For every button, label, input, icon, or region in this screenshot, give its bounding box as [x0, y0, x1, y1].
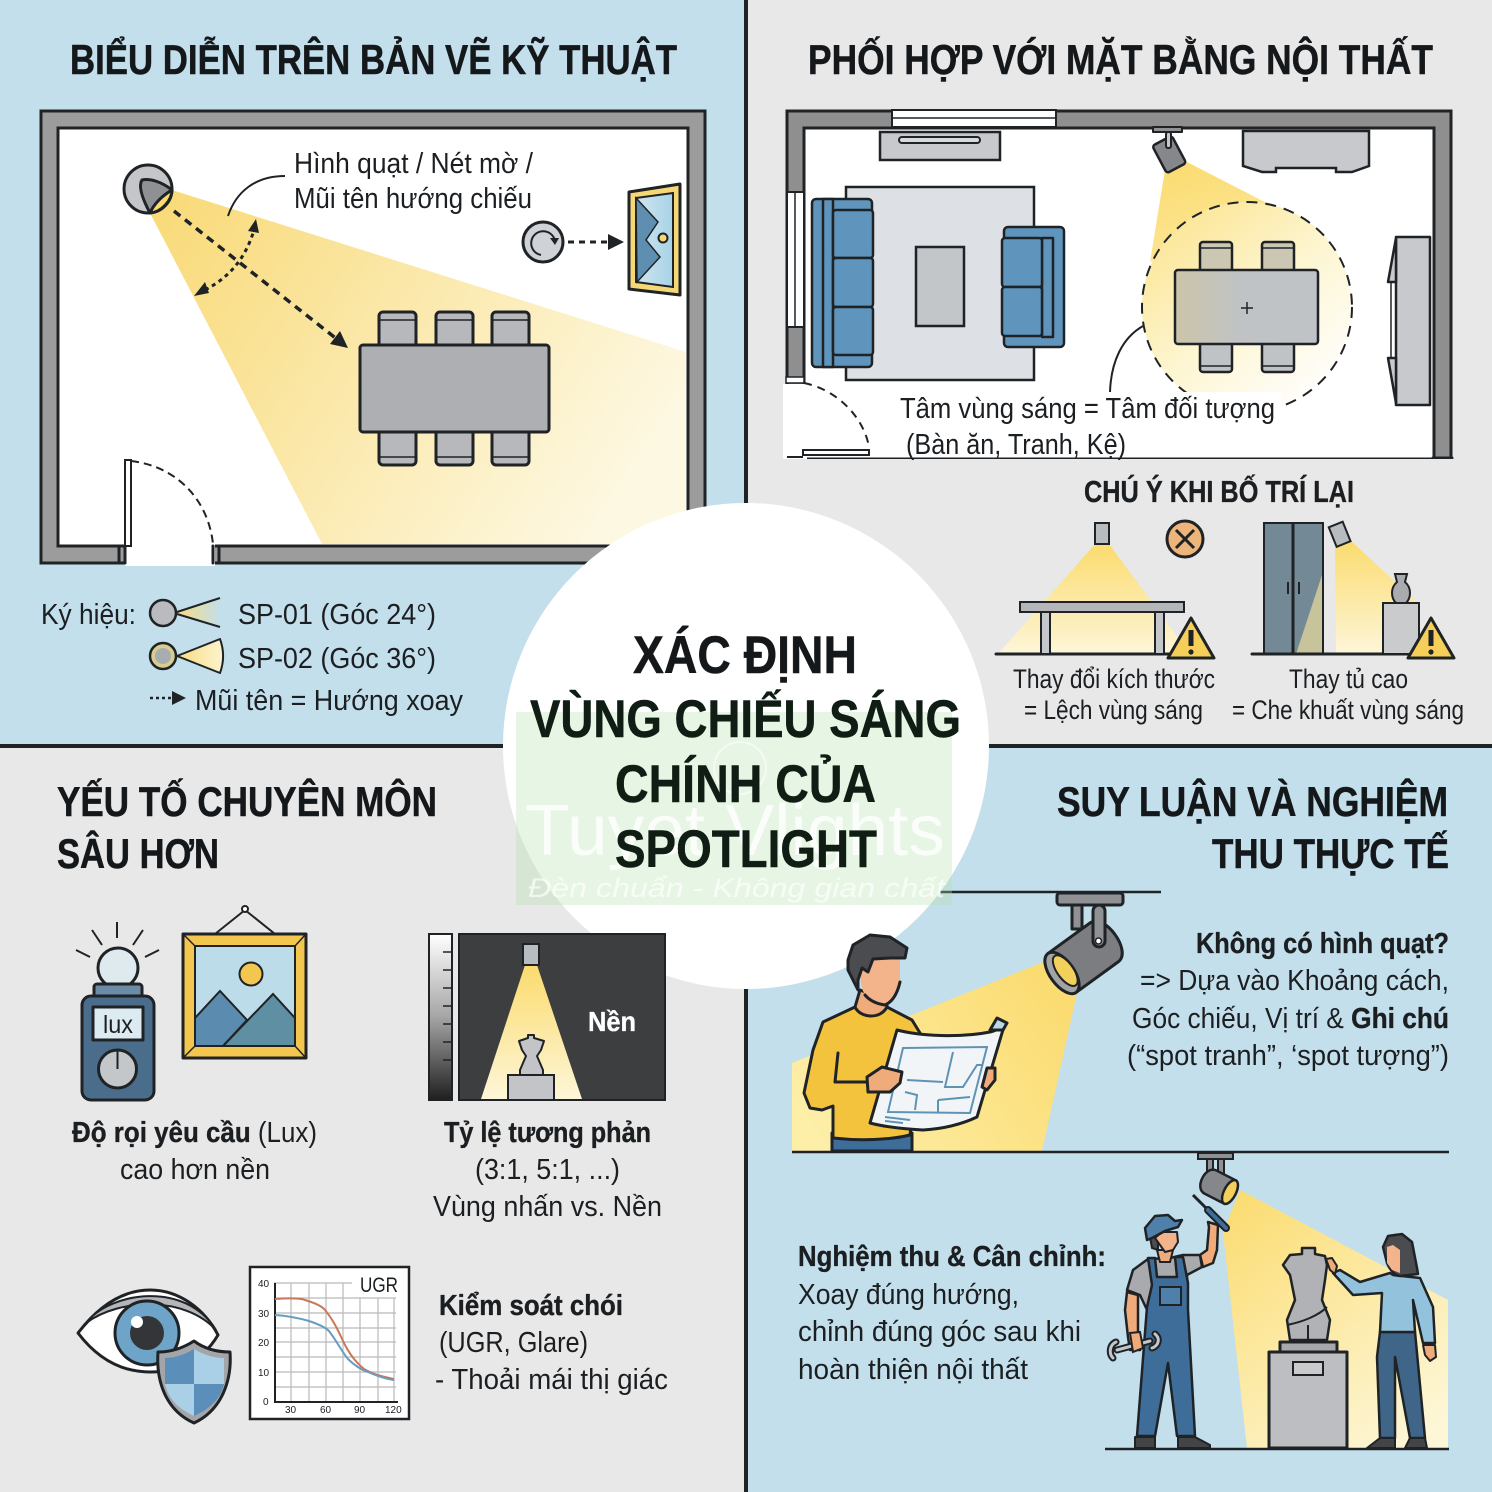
central white circle — [503, 503, 989, 989]
symbol legend: SP-01 (Góc 24°) — [238, 599, 436, 631]
second track spotlight — [1196, 1153, 1241, 1206]
caption: contrast ratio: (3:1, 5:1, ...) — [475, 1154, 620, 1186]
legend icon SP-01 — [150, 598, 220, 627]
caption: acceptance and adjustment: chỉnh đúng góc sau khi — [798, 1316, 1081, 1348]
axis labels: 60 — [320, 1405, 332, 1416]
axis labels: 10 — [258, 1368, 270, 1379]
wall spotlight symbol with arrow — [523, 222, 624, 262]
heading: expertise: YẾU TỐ CHUYÊN MÔN — [57, 777, 437, 825]
caption: glare control: (UGR, Glare) — [439, 1327, 588, 1359]
warning caption: size change: = Lệch vùng sáng — [1024, 695, 1203, 725]
axis labels: 40 — [258, 1279, 270, 1290]
symbol legend: Mũi tên = Hướng xoay — [195, 685, 463, 717]
legend icon SP-02 — [150, 639, 223, 673]
main title — [530, 625, 961, 879]
axis labels: 90 — [354, 1405, 366, 1416]
rug — [846, 187, 1034, 380]
symbol legend — [41, 598, 463, 717]
spotlight symbol — [124, 165, 172, 213]
dining table with chairs — [1175, 242, 1318, 372]
caption: illuminance: cao hơn nền — [120, 1154, 270, 1186]
ceiling spotlight — [1152, 127, 1186, 173]
caption: contrast ratio: Tỷ lệ tương phản — [444, 1117, 651, 1149]
symbol legend: SP-02 (Góc 36°) — [238, 643, 436, 675]
caption: illuminance — [72, 1117, 317, 1186]
warning caption: size change — [1013, 664, 1215, 725]
warning caption: size change: Thay đổi kích thước — [1013, 664, 1215, 694]
caption: acceptance and adjustment: hoàn thiện nội thất — [798, 1354, 1028, 1386]
callout text: Hình quạt / Nét mờ / — [294, 148, 534, 180]
curve: upper — [275, 1298, 394, 1379]
icon: warning triangle — [1408, 618, 1454, 658]
right-hand shelf — [1388, 237, 1430, 405]
callout text: Mũi tên hướng chiếu — [294, 183, 532, 215]
woman pointing at statue — [1326, 1234, 1436, 1448]
chart: UGR glare curve — [250, 1267, 409, 1419]
light beam on statue — [1223, 1190, 1448, 1448]
door swing — [804, 383, 869, 447]
caption: glare control: - Thoải mái thị giác — [435, 1364, 668, 1396]
sofa — [812, 199, 873, 367]
statue on pedestal — [1269, 1248, 1347, 1448]
coffee table — [916, 247, 964, 326]
heading: inference: THU THỰC TẾ — [1212, 830, 1449, 877]
icon: error cross — [1167, 521, 1203, 557]
heading: inference — [1057, 777, 1449, 877]
light beam on reader — [792, 961, 1077, 1151]
caption: illuminance: Độ rọi yêu cầu (Lux) — [72, 1117, 317, 1149]
main title: VÙNG CHIẾU SÁNG — [530, 689, 961, 749]
callout text: Tâm vùng sáng = Tâm đối tượng — [900, 393, 1275, 425]
door — [125, 460, 213, 546]
callout leader — [1110, 326, 1143, 392]
screwdriver — [1193, 1195, 1226, 1228]
warning caption: tall cabinet — [1232, 664, 1464, 725]
wrench — [1110, 1334, 1158, 1358]
text: no fan shape: (“spot tranh”, ‘spot tượng”) — [1127, 1040, 1449, 1072]
callout leader — [228, 176, 285, 216]
floor line — [1105, 1448, 1449, 1450]
legend arrow — [150, 691, 186, 705]
caption: contrast ratio — [433, 1117, 662, 1223]
text: no fan shape: Góc chiếu, Vị trí & Ghi chú — [1132, 1003, 1449, 1035]
caption: contrast ratio: Vùng nhấn vs. Nền — [433, 1191, 662, 1223]
panel: technical drawing — [41, 35, 705, 717]
text: no fan shape: => Dựa vào Khoảng cách, — [1140, 965, 1449, 997]
callout text: (Bàn ăn, Tranh, Kệ) — [906, 429, 1126, 461]
callout text — [895, 392, 1281, 461]
callout text — [294, 148, 534, 215]
room plan walls — [780, 110, 1454, 464]
heading: expertise: SÂU HƠN — [57, 829, 219, 877]
panel: interior layout coordination — [780, 35, 1464, 725]
caption: acceptance and adjustment: Nghiệm thu & Cân chỉnh: — [798, 1241, 1106, 1273]
axis labels: 120 — [385, 1405, 402, 1416]
panel: deeper expertise — [57, 777, 668, 1423]
lit dining zone — [1142, 127, 1352, 412]
door threshold — [787, 450, 869, 457]
caption: acceptance and adjustment: Xoay đúng hướng, — [798, 1279, 1019, 1311]
person reading blueprint — [804, 935, 1007, 1151]
worker adjusting spotlight — [1110, 1195, 1226, 1448]
axis labels: 30 — [285, 1405, 297, 1416]
watermark: Đèn chuẩn - Không gian chất — [528, 873, 947, 903]
caption: glare control — [435, 1290, 668, 1396]
direction arrows — [174, 211, 348, 348]
watermark: Tuyet Vlights — [525, 791, 945, 871]
dining table — [360, 312, 549, 465]
axis labels: 30 — [258, 1309, 270, 1320]
watermark — [516, 712, 952, 905]
caption: glare control: Kiểm soát chói — [439, 1290, 623, 1322]
warning caption: tall cabinet: Thay tủ cao — [1289, 664, 1408, 694]
symbol legend: Ký hiệu: — [41, 599, 136, 631]
icon: contrast scale and scene — [429, 934, 665, 1100]
axis labels: 0 — [263, 1397, 269, 1408]
icon: framed picture — [183, 906, 306, 1058]
heading: technical drawing: BIỂU DIỄN TRÊN BẢN VẼ KỸ THUẬT — [70, 35, 677, 83]
icon: lux meter — [76, 922, 159, 1100]
axis labels: 20 — [258, 1338, 270, 1349]
icon: contrast scale and scene: Nền — [588, 1006, 636, 1037]
wall painting — [629, 184, 680, 295]
icon: warning triangle — [1168, 618, 1214, 658]
main title: SPOTLIGHT — [615, 820, 877, 879]
icon: lux meter: lux — [103, 1011, 133, 1039]
main title: XÁC ĐỊNH — [633, 625, 857, 685]
heading: expertise — [57, 777, 437, 877]
chart: UGR glare curve: UGR — [360, 1274, 398, 1297]
panel: inference and site acceptance — [792, 777, 1449, 1449]
wall cabinets — [880, 131, 1369, 172]
main title: CHÍNH CỦA — [615, 754, 876, 814]
axis labels — [258, 1279, 402, 1416]
divider floor line — [792, 1151, 1449, 1153]
warning: tall cabinet — [1252, 522, 1454, 658]
text: no fan shape: Không có hình quạt? — [1196, 928, 1449, 960]
curve: lower — [275, 1315, 394, 1380]
caption: acceptance and adjustment — [798, 1241, 1106, 1386]
subheading: rearrangement notes: CHÚ Ý KHI BỐ TRÍ LẠI — [1084, 473, 1354, 509]
light cone — [150, 190, 686, 544]
ceiling line and track spotlight — [940, 892, 1161, 999]
warning: size change — [996, 521, 1214, 658]
text: no fan shape — [1127, 928, 1449, 1072]
floor plan room — [41, 111, 705, 566]
armchair — [1002, 227, 1064, 347]
icon: eye with shield — [78, 1290, 230, 1423]
